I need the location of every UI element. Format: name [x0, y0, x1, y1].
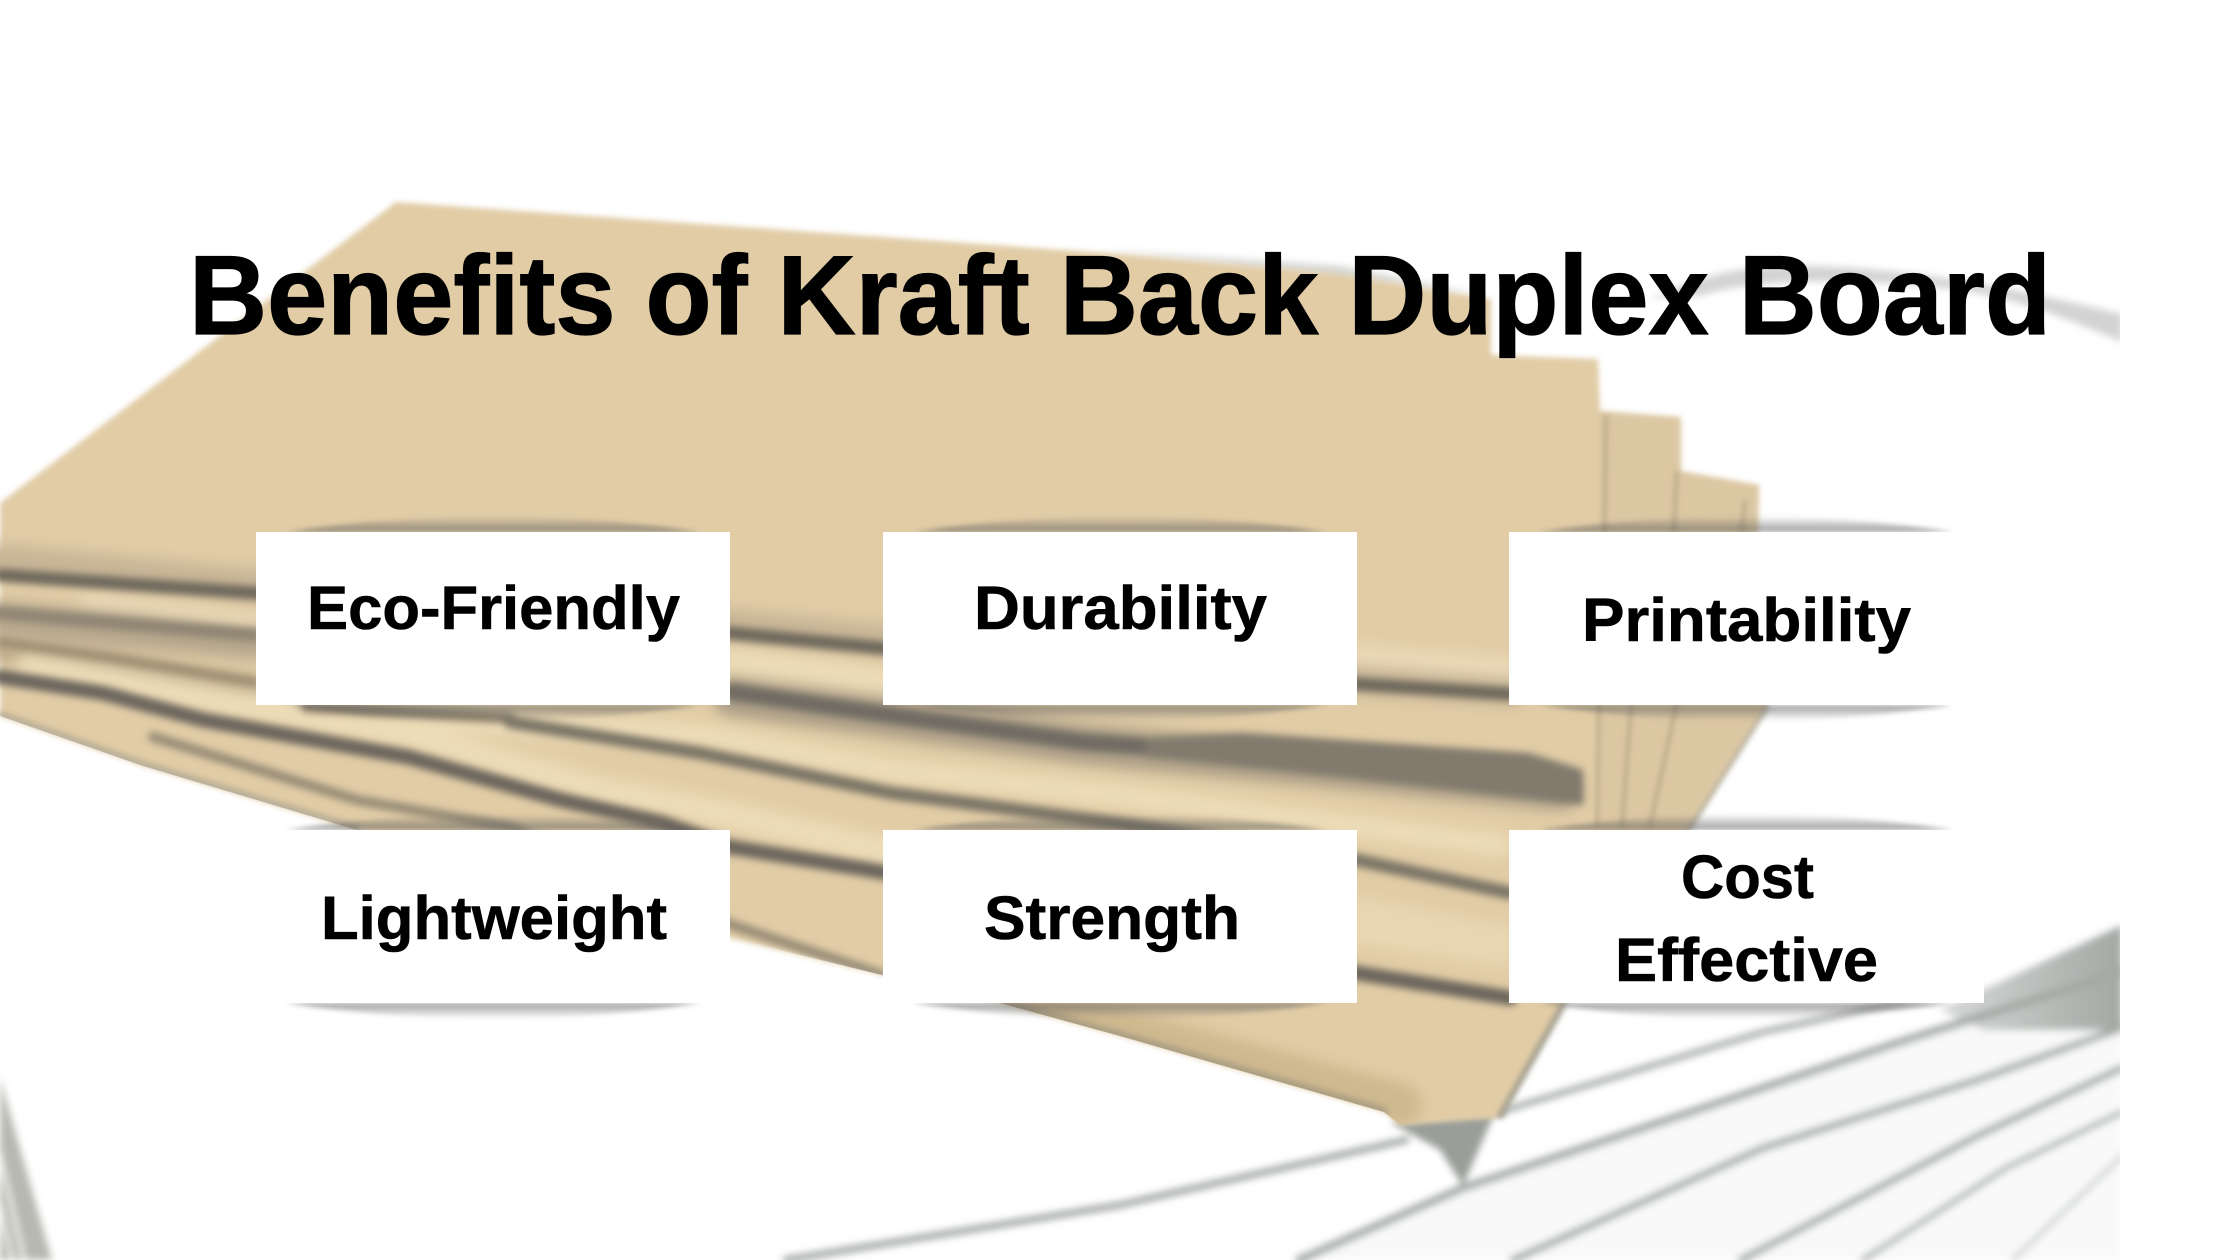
card: Cost Effective: Cost: [1681, 843, 1814, 911]
board-edge stripes: [0, 415, 1745, 1112]
title: Benefits of Kraft Back Duplex Board: [189, 233, 2051, 358]
card: Durability: [883, 516, 1357, 721]
card: Printability: Printability: [1582, 586, 1911, 654]
card: Printability: [1509, 516, 1984, 721]
card: Lightweight: Lightweight: [321, 884, 667, 952]
kraft sheets: [0, 202, 1768, 1125]
card: Strength: Strength: [984, 884, 1240, 952]
card: Cost Effective: Effective: [1615, 926, 1878, 994]
bottom-left sheet edges: [0, 1078, 52, 1260]
background photo: stack of kraft boards: [0, 202, 2122, 1260]
vertical sheet-edge lines: [1597, 415, 1745, 827]
card: Eco-Friendly: Eco-Friendly: [307, 574, 680, 642]
top-right sheet edge: [1650, 266, 2122, 342]
thick dark wedge: [1146, 733, 1583, 805]
soft band tones: [0, 560, 1560, 1105]
right margin white: [2120, 0, 2240, 1260]
card: Durability: Durability: [974, 574, 1267, 642]
card: Eco-Friendly: [256, 516, 730, 721]
grey shadow above kraft edge: [1138, 251, 1466, 292]
card: Lightweight: [256, 814, 730, 1019]
shadow at kraft corner: [1390, 1112, 1495, 1186]
dark lines: [0, 575, 1583, 1112]
card: Strength: [883, 814, 1357, 1019]
white sheet fan: [0, 250, 2122, 1260]
card: Cost Effective: [1509, 814, 1984, 1019]
